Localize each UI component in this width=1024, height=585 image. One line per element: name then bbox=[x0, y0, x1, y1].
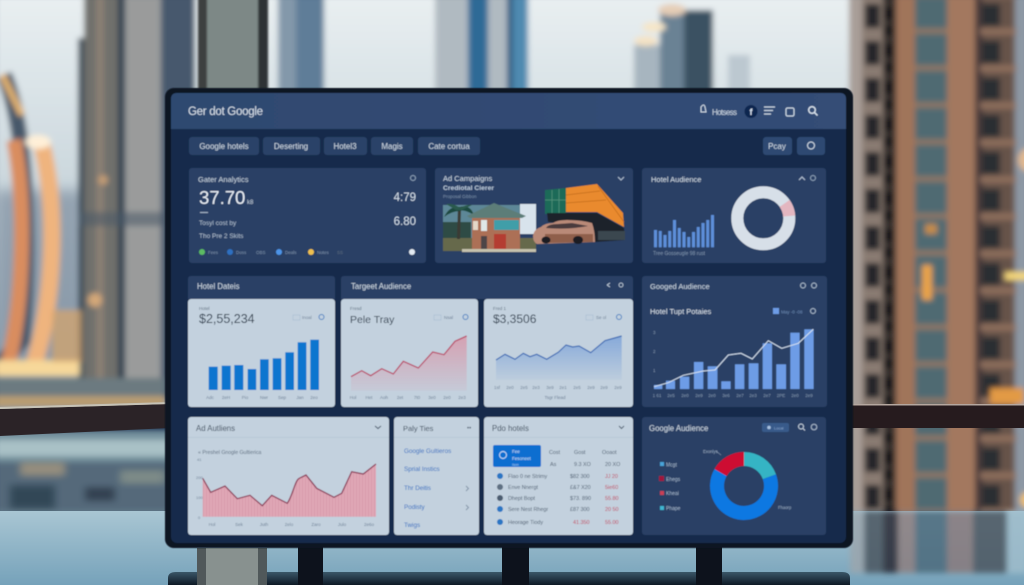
card: pink area chart: 3e0 bbox=[428, 395, 436, 400]
panel: google audience combo chart: 3e6 bbox=[722, 393, 730, 398]
centre tower bbox=[435, 0, 528, 95]
navigation tabs bbox=[189, 137, 825, 155]
legend: Fees bbox=[208, 250, 219, 255]
monitor bbox=[165, 88, 853, 548]
right distant tower bbox=[634, 4, 750, 100]
panel: google audience combo chart: 3 bbox=[653, 330, 656, 335]
table rows: Gost bbox=[574, 450, 586, 456]
panel: ad audience line chart: « Preshel Gnogle Gultierica bbox=[198, 450, 262, 456]
table rows: JJ 20 bbox=[605, 474, 618, 480]
panel: target audience: Targeet Audience bbox=[351, 282, 411, 291]
card: pink area chart bbox=[341, 299, 478, 407]
panel: google audience combo chart: Hotel Tupt Potaies bbox=[650, 307, 712, 316]
mini bar chart bbox=[654, 215, 714, 247]
panel: ad audience line chart: Ad Autliens bbox=[196, 424, 235, 433]
panel: analytics summary: 6.80 bbox=[394, 216, 416, 228]
panel: ad audience line chart: Sek bbox=[235, 522, 244, 527]
panel: google audience combo chart: 2e0 bbox=[708, 393, 716, 398]
legend: Deals bbox=[285, 250, 297, 255]
panel: hotel details: Nwr bbox=[260, 395, 268, 400]
card: blue area chart: 2e9 bbox=[587, 385, 595, 390]
panel: hotel details: Inoal bbox=[302, 315, 312, 320]
navigation tabs: Magis bbox=[381, 142, 403, 151]
panel: ad audience line chart: Juth bbox=[260, 522, 269, 527]
panel: daily ties menu: Thr Deitis bbox=[404, 485, 431, 492]
panel: hotel details: Jan bbox=[296, 395, 304, 400]
window pillar behind monitor bbox=[198, 0, 268, 90]
panel: hotel details: Sep bbox=[278, 395, 286, 400]
card: blue area chart: 2e3 bbox=[532, 385, 540, 390]
panel: hotel audience: Hotel Audience bbox=[651, 175, 701, 184]
table rows: £87 300 bbox=[570, 507, 590, 513]
dashboard header bar bbox=[171, 93, 846, 129]
panel: google audience combo chart: 2PE bbox=[777, 393, 785, 398]
window railing bbox=[0, 403, 1024, 436]
table rows: 20 50 bbox=[605, 507, 618, 513]
panel: google audience combo chart bbox=[642, 276, 827, 407]
card: blue area chart: $3,3506 bbox=[493, 312, 537, 326]
card: blue area chart: Tsgr Flead bbox=[544, 395, 566, 400]
monitor stand legs bbox=[298, 546, 722, 585]
card: blue area chart: 3e9 bbox=[546, 385, 554, 390]
panel: hotel details: 2eo bbox=[310, 395, 318, 400]
header actions: Hotsess bbox=[712, 108, 737, 117]
panel: analytics summary: Tosyl cost by bbox=[199, 220, 237, 227]
panel: hotel details: 2eH bbox=[222, 395, 230, 400]
right building bbox=[849, 0, 1024, 515]
panel: target audience bbox=[341, 276, 633, 407]
panel: google audience donut: Google Audience bbox=[649, 424, 708, 433]
legend: Phape bbox=[666, 506, 681, 512]
table rows: $73. 890 bbox=[570, 496, 591, 502]
panel: google audience combo chart: 2e5 bbox=[667, 393, 675, 398]
panel: google audience donut: Fhaorp bbox=[778, 505, 792, 510]
table rows: 55.80 bbox=[605, 496, 618, 502]
card: blue area chart: 2e9 bbox=[600, 385, 608, 390]
card: pink area chart: Pele Tray bbox=[350, 314, 395, 326]
card: pink area chart: 2et bbox=[397, 395, 404, 400]
panel: google audience combo chart: 2e0 bbox=[791, 393, 799, 398]
legend: Kheai bbox=[666, 491, 679, 497]
panel: ad campaigns with photo collage: Crediotal Cierer bbox=[443, 185, 494, 192]
panel: google audience donut: Local bbox=[774, 426, 784, 430]
legend: Mcgt bbox=[666, 462, 677, 468]
table rows: Cost bbox=[549, 450, 561, 456]
donut chart bbox=[717, 459, 771, 513]
navigation tabs: Deserting bbox=[274, 142, 308, 151]
table rows: As bbox=[550, 462, 557, 468]
panel: ad campaigns with photo collage: Proposal Gibbon bbox=[443, 194, 477, 199]
highlighted button: Fee bbox=[512, 449, 520, 454]
panel: daily ties menu: Twigs bbox=[404, 522, 420, 529]
lower left view below railing bbox=[0, 430, 170, 515]
photo: orange building and car bbox=[533, 184, 625, 244]
card: blue area chart: 2e0 bbox=[506, 385, 514, 390]
panel: ad campaigns with photo collage bbox=[435, 168, 633, 263]
panel: hotel details: Pio bbox=[242, 395, 249, 400]
panel: ad audience line chart: 2e6o bbox=[364, 522, 375, 527]
panel: google audience combo chart: 2e9 bbox=[805, 393, 813, 398]
panel: ad campaigns with photo collage: Ad Campaigns bbox=[443, 174, 492, 183]
panel: daily ties menu: Paly Ties bbox=[403, 424, 434, 433]
panel: google audience combo chart: May -0 -08 bbox=[781, 310, 803, 314]
card: pink area chart: 2e0 bbox=[443, 395, 451, 400]
panel: ad audience line chart: 0 bbox=[198, 515, 201, 520]
card: blue area chart bbox=[484, 299, 633, 407]
table rows: 55.00 bbox=[605, 520, 618, 526]
panel: hotel details: Hotel Dateis bbox=[197, 282, 240, 291]
panel: ad audience line chart bbox=[188, 417, 389, 535]
panel: hotel details bbox=[188, 276, 335, 407]
legend bbox=[199, 249, 415, 255]
panel: ad audience line chart: 100 bbox=[196, 495, 203, 500]
card: blue area chart: 2e1 bbox=[559, 385, 567, 390]
panel: ad audience line chart: 2elo bbox=[285, 522, 294, 527]
panel: analytics summary: Tho Pre 2 Skits bbox=[199, 233, 244, 240]
table rows: 5ie60 bbox=[605, 485, 618, 491]
legend: Doss bbox=[236, 250, 247, 255]
panel: google audience combo chart: 2e7 bbox=[763, 393, 771, 398]
left tower bbox=[78, 0, 196, 400]
left curved landmark tower bbox=[0, 75, 52, 372]
highlighted button bbox=[493, 445, 541, 467]
table rows: Dhept Bopt bbox=[508, 496, 535, 502]
panel: ad audience line chart: Julo bbox=[338, 522, 347, 527]
legend: Notes bbox=[317, 250, 330, 255]
panel: analytics summary: Gater Analytics bbox=[198, 175, 249, 184]
panel: daily ties menu: Sprial Instics bbox=[404, 466, 440, 473]
panel: hotel details: Adc bbox=[206, 395, 215, 400]
legend: Ehegs bbox=[666, 477, 681, 483]
table rows: 41.350 bbox=[573, 520, 590, 526]
panel: analytics summary bbox=[189, 168, 426, 263]
table rows: Ooaot bbox=[602, 450, 617, 456]
panel: google audience combo chart: 2e7 bbox=[736, 393, 744, 398]
panel: daily ties menu: Podisty bbox=[404, 504, 426, 511]
header actions: f bbox=[750, 107, 754, 117]
table rows: Flao 0 ne Strimy bbox=[508, 474, 548, 480]
table rows: Heorage Tiody bbox=[508, 520, 543, 526]
panel: analytics summary: k8 bbox=[247, 200, 254, 206]
panel: google audience combo chart: Googed Audience bbox=[650, 282, 710, 291]
highlighted button: Fesoneet bbox=[512, 456, 532, 461]
navigation tabs: Cate cortua bbox=[428, 142, 470, 151]
navigation tabs: Pcay bbox=[768, 142, 786, 151]
panel: analytics summary: 4:79 bbox=[394, 192, 416, 204]
panel: ad audience line chart: 200 bbox=[196, 475, 203, 480]
legend bbox=[659, 462, 681, 512]
panel: daily ties menu: Google Gultieros bbox=[404, 448, 451, 455]
glass table with reflection bbox=[0, 511, 1024, 585]
dashboard title: Ger dot Google bbox=[188, 106, 263, 118]
donut chart bbox=[737, 192, 789, 244]
highlighted button: Item bbox=[512, 463, 519, 467]
panel: hotel details: Hotel bbox=[199, 306, 210, 311]
card: pink area chart: Het bbox=[365, 395, 373, 400]
panel: ad audience line chart: Hol bbox=[209, 522, 215, 527]
card: pink area chart: Hol bbox=[350, 395, 356, 400]
panel: google audience combo chart: 1 61 bbox=[653, 393, 662, 398]
legend: SS bbox=[337, 250, 343, 255]
card: blue area chart: 1sf bbox=[494, 385, 501, 390]
card: pink area chart: Aoh bbox=[380, 395, 388, 400]
panel: google audience combo chart: 2 bbox=[653, 349, 656, 354]
table rows: $82 300 bbox=[570, 474, 590, 480]
card: pink area chart: 7t0 bbox=[414, 395, 421, 400]
card: pink area chart: Fresd bbox=[350, 306, 362, 311]
panel: pdo hotels table: Pdo hotels bbox=[492, 424, 529, 433]
navigation tabs: Google hotels bbox=[199, 142, 249, 151]
distant tower bbox=[278, 0, 324, 95]
card: pink area chart: 2e3 bbox=[458, 395, 466, 400]
panel: hotel audience: Tree Gosseugle 98 rust bbox=[653, 251, 706, 257]
card: pink area chart: Nsal bbox=[444, 315, 453, 320]
panel: google audience donut: Exonlys bbox=[703, 449, 718, 454]
card: blue area chart: 2e9 bbox=[614, 385, 622, 390]
card: blue area chart: 2e5 bbox=[573, 385, 581, 390]
panel: google audience combo chart: 2e9 bbox=[695, 393, 703, 398]
panel: pdo hotels table bbox=[484, 417, 633, 535]
navigation tabs: Hotel3 bbox=[333, 142, 357, 151]
card: blue area chart: 2e5 bbox=[520, 385, 528, 390]
card: blue area chart: Se ol bbox=[596, 315, 606, 320]
table rows: £&7 X20 bbox=[570, 485, 591, 491]
trend line bbox=[654, 329, 813, 387]
panel: daily ties menu: •• bbox=[467, 426, 471, 432]
table rows: 9.3 XO bbox=[574, 462, 591, 468]
panel: hotel audience bbox=[642, 168, 826, 263]
panel: google audience combo chart: 2e3 bbox=[749, 393, 757, 398]
panel: google audience combo chart: 1 bbox=[653, 368, 656, 373]
table rows: 20 XO bbox=[605, 462, 620, 468]
photo: hotel building bbox=[443, 203, 536, 252]
header actions bbox=[701, 105, 818, 118]
panel: google audience combo chart: 2e0 bbox=[681, 393, 689, 398]
legend: OBS bbox=[256, 250, 266, 255]
panel: ad audience line chart: 41 bbox=[197, 457, 202, 462]
panel: google audience donut bbox=[642, 417, 826, 535]
table rows: Enve Nnergt bbox=[508, 485, 538, 491]
panel: hotel details: $2,55,234 bbox=[199, 312, 255, 326]
bar chart bbox=[209, 340, 319, 390]
panel: daily ties menu bbox=[394, 417, 479, 535]
table rows bbox=[497, 450, 620, 526]
panel: ad audience line chart: Zaro bbox=[311, 522, 321, 527]
bars bbox=[654, 329, 814, 389]
table rows: Sere Nest Rhegr bbox=[508, 507, 548, 513]
card: blue area chart: Fred 1 bbox=[493, 306, 507, 311]
panel: analytics summary: 37.70 bbox=[199, 187, 245, 208]
